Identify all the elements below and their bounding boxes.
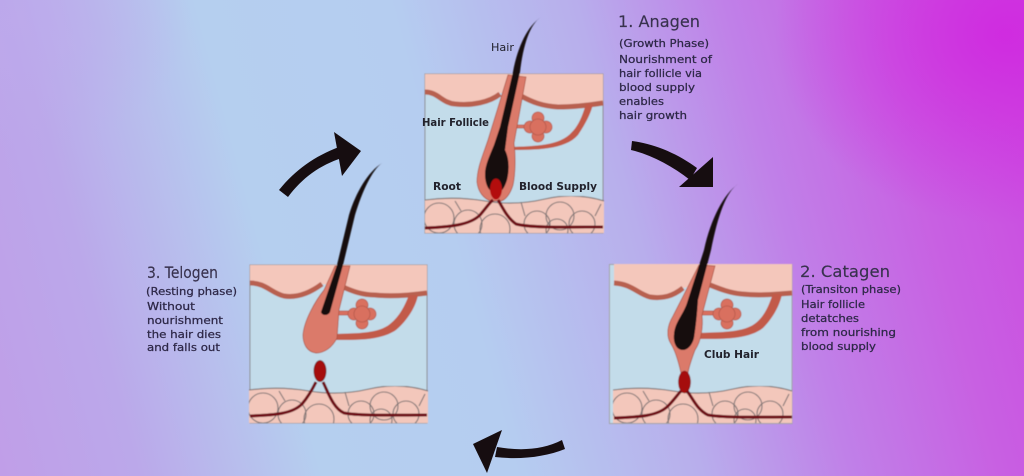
text block: catagen: from nourishing — [801, 327, 896, 339]
text block: catagen: (Transiton phase) — [801, 284, 901, 296]
detached root papilla — [678, 371, 690, 393]
text block: anagen: blood supply — [619, 82, 695, 94]
detached root papilla — [314, 360, 326, 382]
lower skin cells — [424, 196, 604, 244]
text block: telogen: (Resting phase) — [146, 286, 237, 298]
upper skin layer — [250, 265, 427, 296]
blood line — [614, 391, 792, 418]
follicle — [668, 265, 715, 373]
text block: anagen: 1. Anagen — [618, 12, 700, 31]
hair — [674, 184, 738, 350]
blood line — [250, 382, 427, 416]
sebaceous gland — [700, 299, 741, 329]
label: hair follicle: Hair Follicle — [422, 117, 489, 129]
text block: catagen — [800, 262, 901, 353]
skin band — [425, 92, 603, 107]
arrow: anagen to catagen — [631, 141, 713, 187]
label: root: Root — [433, 181, 461, 193]
lower skin cells — [612, 386, 792, 434]
blood vessel arm — [335, 295, 418, 340]
blood vessel arm — [697, 294, 782, 339]
text block: catagen: blood supply — [801, 341, 876, 353]
label: club hair: Club Hair — [704, 349, 760, 361]
label: blood supply: Blood Supply — [519, 181, 597, 193]
sebaceous gland — [338, 299, 376, 329]
upper skin layer — [425, 74, 603, 106]
sebaceous gland — [510, 112, 552, 142]
lower skin cells — [248, 386, 428, 434]
arrow: catagen to telogen — [473, 430, 565, 473]
text block: telogen: nourishment — [147, 315, 223, 327]
text block: anagen: (Growth Phase) — [619, 38, 709, 50]
panel: telogen diagram — [248, 163, 428, 434]
skin band — [614, 283, 792, 298]
root papilla — [490, 178, 502, 200]
hair — [485, 17, 541, 193]
panel: catagen diagram — [610, 184, 792, 434]
text block: anagen: enables — [619, 96, 664, 108]
text block: telogen: Without — [147, 301, 195, 313]
blood line — [425, 200, 603, 228]
text block: telogen: the hair dies — [147, 329, 221, 341]
text block: anagen — [618, 12, 712, 122]
upper skin layer — [614, 264, 792, 297]
text block: catagen: Hair follicle — [801, 299, 865, 311]
text block: telogen — [146, 263, 237, 354]
text block: telogen: and falls out — [147, 342, 220, 354]
skin band — [250, 283, 427, 296]
panel: anagen diagram — [424, 17, 604, 244]
text block: catagen: 2. Catagen — [800, 262, 890, 281]
arrow: telogen to anagen — [279, 132, 361, 197]
text block: catagen: detatches — [801, 313, 859, 325]
hair — [321, 163, 382, 315]
text block: telogen: 3. Telogen — [147, 263, 218, 282]
follicle — [303, 266, 350, 353]
blood vessel arm — [510, 104, 593, 150]
text block: anagen: Nourishment of — [619, 54, 712, 66]
follicle — [477, 75, 526, 201]
label: hair: Hair — [491, 42, 515, 54]
text block: anagen: hair growth — [619, 110, 687, 122]
text block: anagen: hair follicle via — [619, 68, 702, 80]
